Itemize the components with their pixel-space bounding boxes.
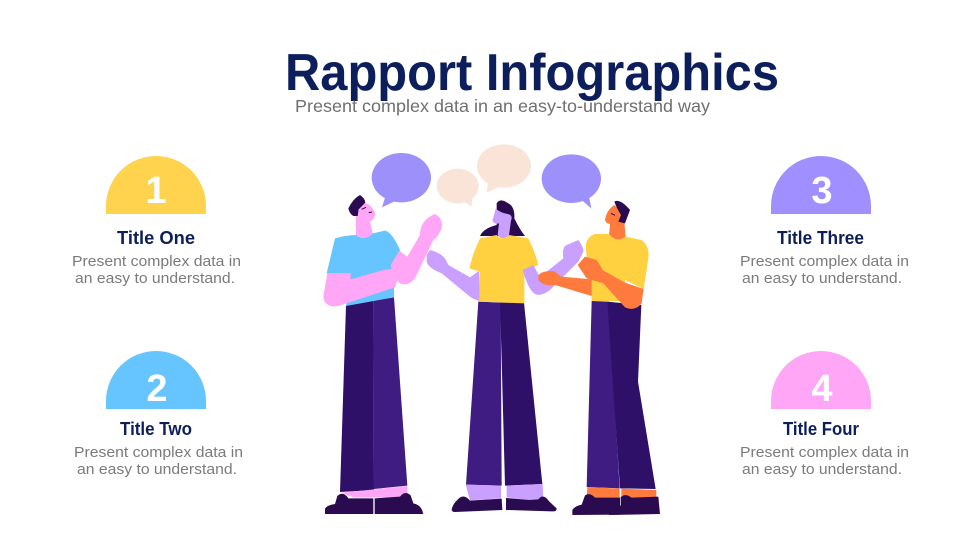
heading: title two: Title Two <box>120 419 192 439</box>
panel: item three <box>740 156 909 287</box>
semicircle badge one <box>106 156 206 214</box>
right man upper arm <box>578 257 644 309</box>
woman right arm <box>523 240 583 295</box>
person: right man legs <box>572 301 660 515</box>
body text two: Present complex data in <box>74 444 243 461</box>
body text one <box>72 253 241 287</box>
right man lower arm <box>538 271 592 296</box>
left man folded arm <box>323 268 397 306</box>
woman left arm <box>427 250 479 301</box>
speech bubble: small peach <box>437 169 479 207</box>
body text three: Present complex data in <box>740 253 909 270</box>
left man shirt <box>327 231 400 306</box>
number three: 3 <box>811 170 833 212</box>
number four: 4 <box>811 368 833 410</box>
speech bubble: left purple <box>372 153 431 207</box>
right man shirt <box>586 234 649 301</box>
person: left man legs <box>325 297 423 514</box>
heading: title one: Title One <box>117 228 195 248</box>
woman hair <box>480 200 525 236</box>
speech bubble: large peach <box>477 144 531 193</box>
body text one: Present complex data in <box>72 253 241 270</box>
woman shirt <box>469 235 538 303</box>
body text four: an easy to understand. <box>742 461 902 478</box>
left man head and neck <box>356 203 375 238</box>
body text two <box>74 444 243 478</box>
person: right man upper body and woman right arm <box>523 201 649 309</box>
left man raised arm <box>391 214 442 284</box>
semicircle badge three <box>771 156 871 214</box>
semicircle badge two <box>106 351 206 409</box>
woman face and neck <box>492 208 512 238</box>
panel: item two <box>74 351 243 478</box>
body text three <box>740 253 909 287</box>
right man hair <box>614 201 630 223</box>
panel: item four <box>740 351 909 478</box>
subtitle: Present complex data in an easy-to-understand way <box>295 96 710 116</box>
body text two: an easy to understand. <box>77 461 237 478</box>
person: left man upper body <box>323 195 442 306</box>
left man face detail <box>362 207 372 213</box>
speech bubbles <box>372 144 601 209</box>
body text four: Present complex data in <box>740 444 909 461</box>
number one: 1 <box>145 170 167 212</box>
illustration: three people talking <box>323 144 660 515</box>
right man face detail <box>611 213 615 215</box>
person: centre woman legs <box>452 302 557 512</box>
body text one: an easy to understand. <box>75 270 235 287</box>
heading: title four: Title Four <box>783 419 859 439</box>
speech bubble: right purple <box>542 154 601 209</box>
person: centre woman upper body <box>427 200 538 303</box>
title: Rapport Infographics <box>285 44 779 102</box>
heading: title three: Title Three <box>777 228 864 248</box>
number two: 2 <box>146 368 168 410</box>
panel: item one <box>72 156 241 287</box>
semicircle badge four <box>771 351 871 409</box>
right man head and neck <box>605 205 626 240</box>
left man hair <box>348 195 365 216</box>
body text four <box>740 444 909 478</box>
body text three: an easy to understand. <box>742 270 902 287</box>
